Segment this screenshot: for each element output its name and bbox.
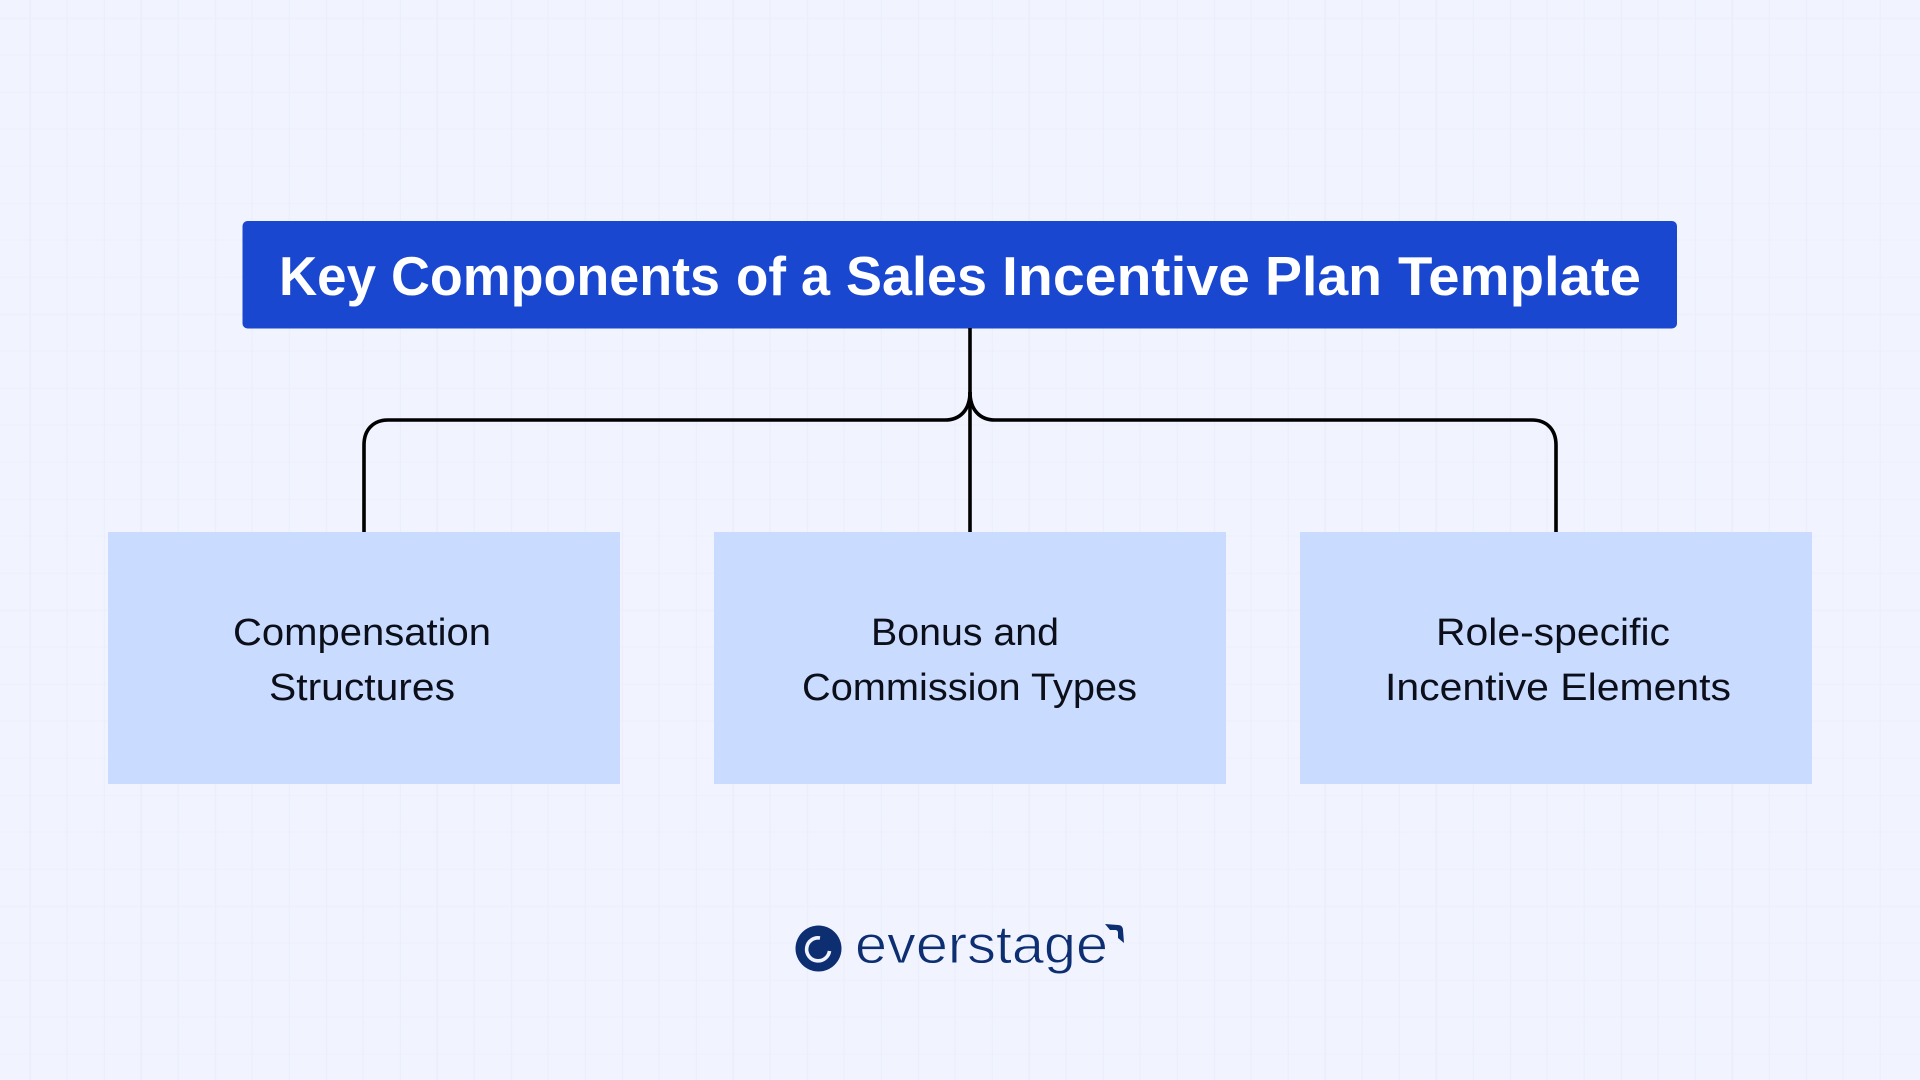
title banner: Components <box>391 245 720 307</box>
box: Compensation Structures <box>108 532 620 784</box>
connector lines <box>364 328 1556 532</box>
box: Role-specific Incentive Elements: Incentive Elements <box>1385 667 1731 709</box>
box: Role-specific Incentive Elements <box>1300 532 1812 784</box>
box: Compensation Structures: Structures <box>269 667 455 709</box>
box: Bonus and Commission Types: Bonus and <box>871 612 1059 654</box>
title banner: Incentive <box>1002 245 1250 307</box>
everstage logo: everstage <box>855 915 1108 975</box>
title banner: Template <box>1398 245 1641 307</box>
box: Compensation Structures: Compensation <box>233 612 491 654</box>
title banner: a <box>801 245 830 307</box>
title banner: Sales <box>846 245 987 307</box>
title banner: of <box>736 245 787 307</box>
title banner <box>242 221 1677 328</box>
title banner: Key <box>279 245 376 307</box>
box: Role-specific Incentive Elements: Role-specific <box>1436 612 1670 654</box>
title banner: Plan <box>1265 245 1382 307</box>
box: Bonus and Commission Types: Commission Types <box>802 667 1137 709</box>
box: Bonus and Commission Types <box>714 532 1226 784</box>
